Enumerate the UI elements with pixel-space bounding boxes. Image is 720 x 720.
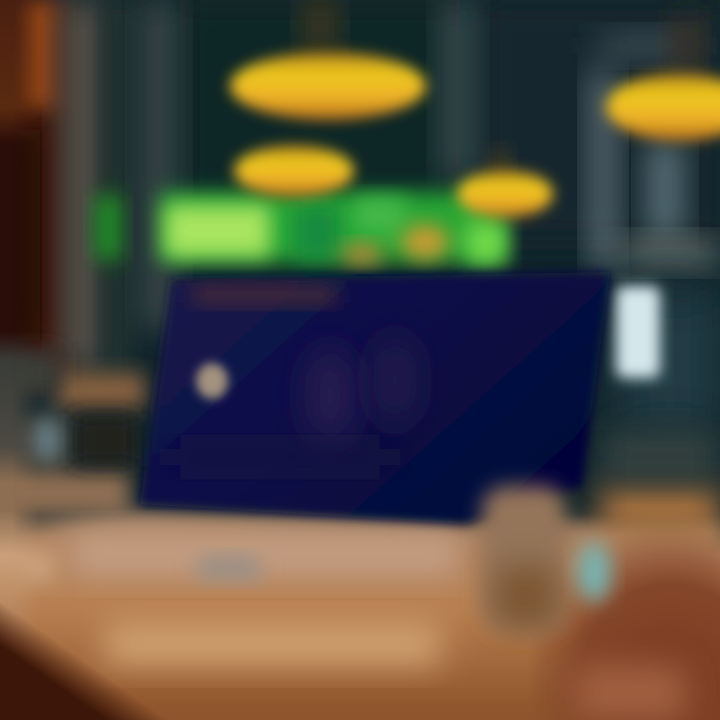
lamp: small right: [457, 150, 553, 218]
mug on table: [482, 486, 611, 631]
green glowing band: [94, 192, 506, 264]
left wall: wooden column and grey pillars: [0, 0, 176, 380]
right side: pale window frames: [442, 0, 720, 430]
laptop screen: dark navy panel: [140, 272, 610, 524]
window highlight right of laptop: [616, 286, 660, 378]
pendant lamps: [230, 0, 720, 265]
background shelves on left: [0, 350, 145, 516]
left edge: fills the blur falloff at the frame border: [0, 0, 36, 624]
screen heading glow: [192, 286, 337, 304]
lamp: lower centre: [234, 145, 354, 197]
screen bright spot: [196, 363, 228, 399]
lamp: far right: [606, 20, 720, 141]
lamp: large centre: [230, 0, 426, 120]
screen faint content: [170, 334, 417, 469]
dark foreground wedge at lower left: [0, 596, 175, 720]
table surface: [0, 432, 720, 720]
lamp: small orange behind laptop: [340, 224, 449, 265]
